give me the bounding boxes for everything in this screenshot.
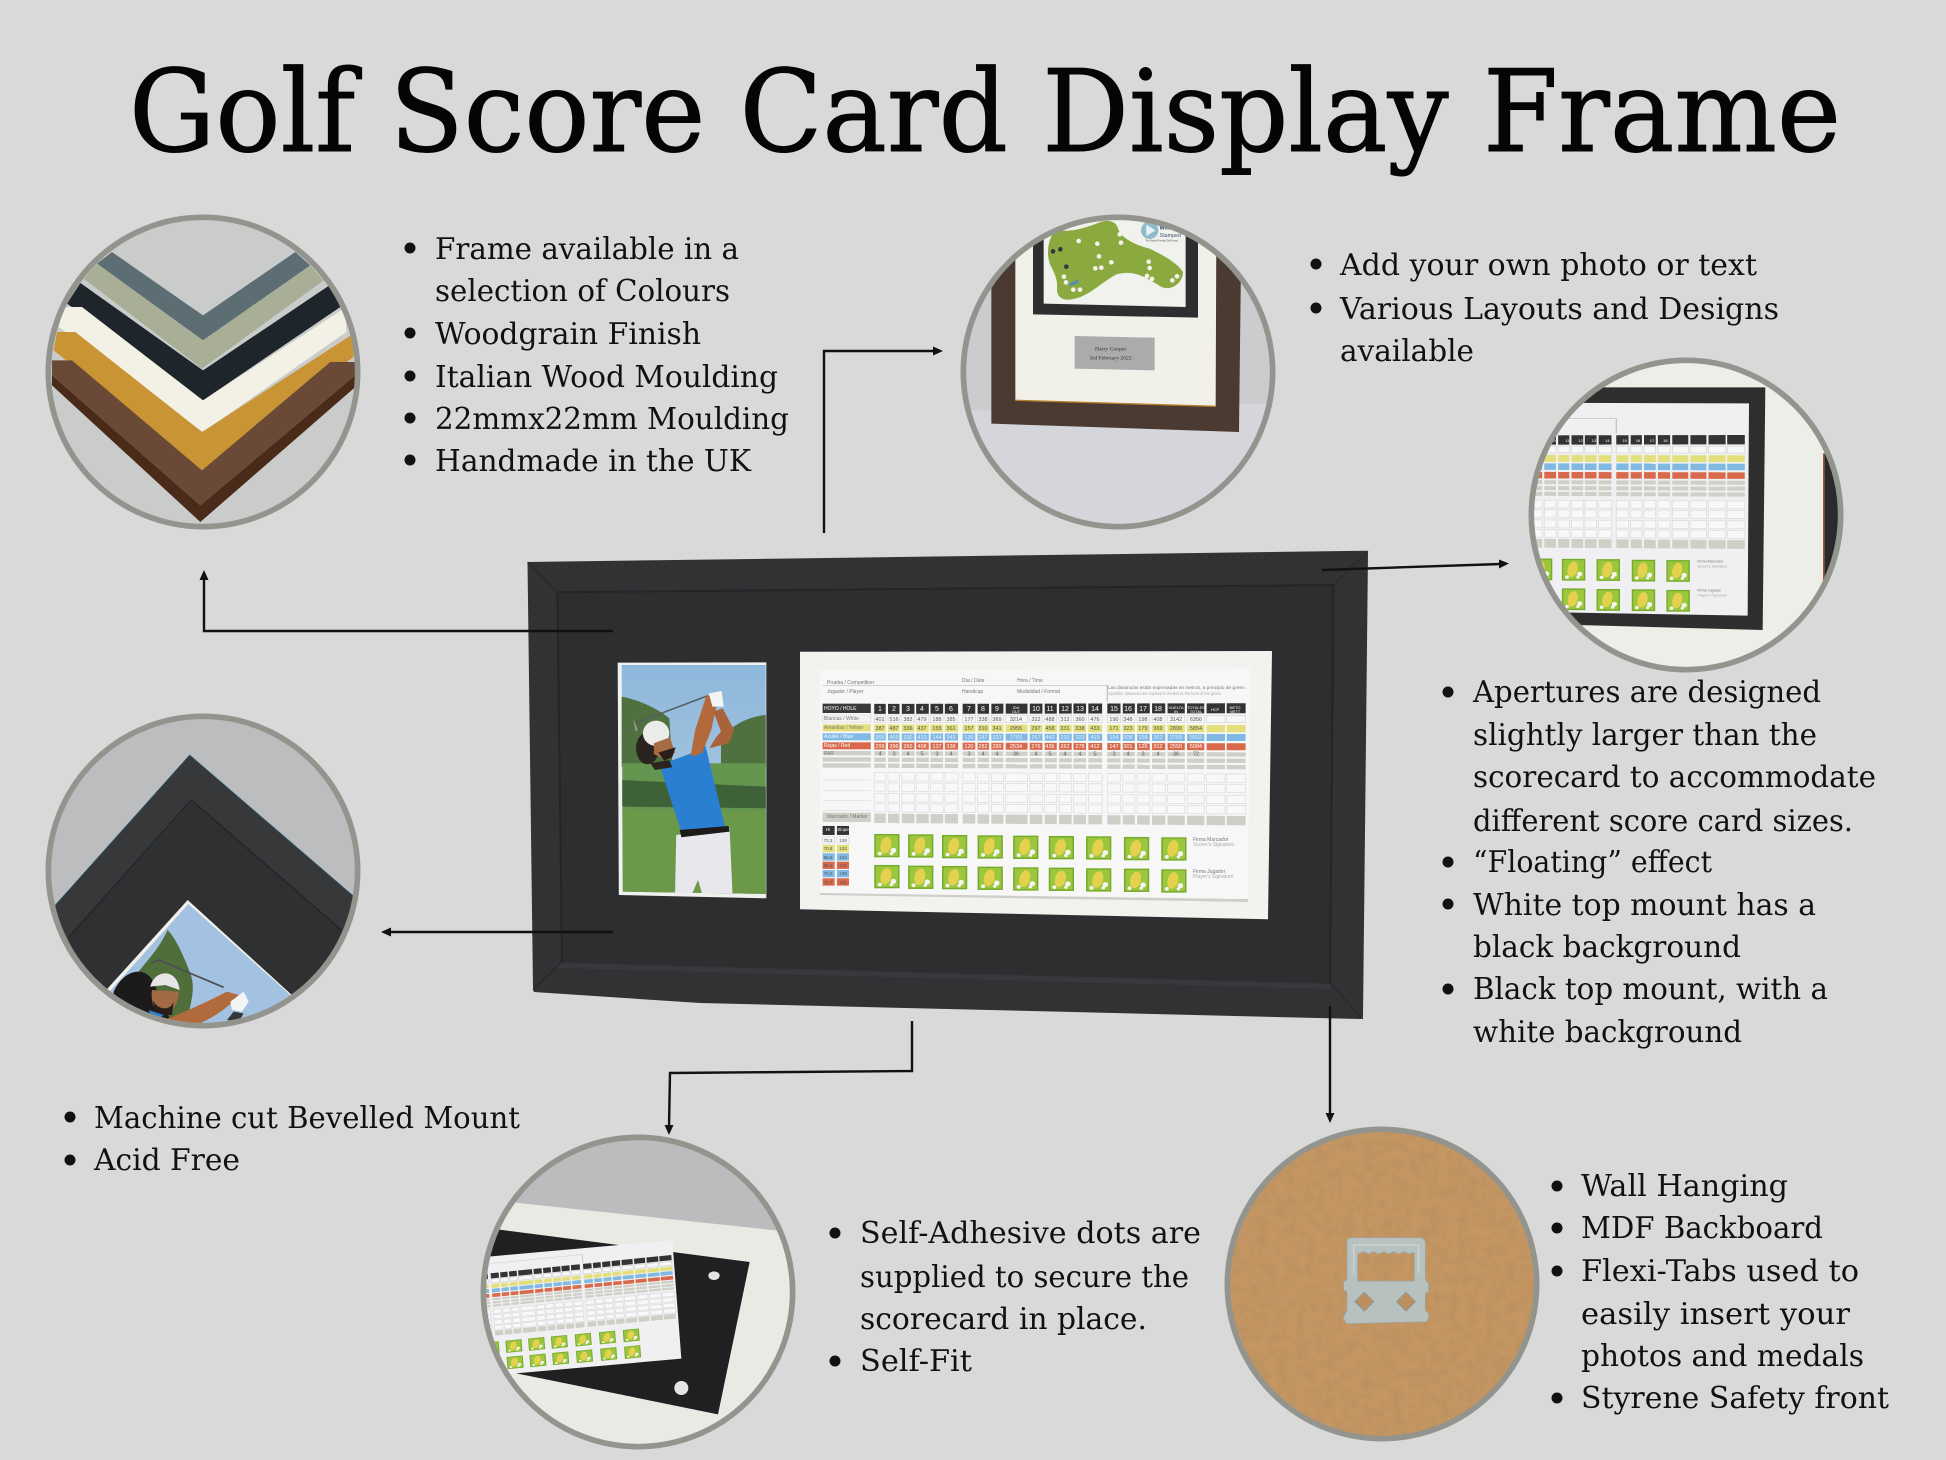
scorecard: 10 xyxy=(1032,706,1040,713)
scorecard: 323 xyxy=(1075,735,1085,741)
text block: mount xyxy=(64,1101,520,1178)
panel: aperture close-up circle: Firma Marcador xyxy=(1697,559,1724,563)
scorecard: 179 xyxy=(1138,726,1148,732)
scorecard: 353 xyxy=(1153,735,1163,741)
scorecard: 139 xyxy=(839,871,847,876)
panel: aperture close-up circle: Scorer's Signature xyxy=(1697,564,1727,568)
scorecard: NETO xyxy=(1229,705,1241,710)
panel: aperture close-up circle: Firma Jugador xyxy=(1697,588,1722,592)
scorecard: 433 xyxy=(1090,726,1100,732)
text block: back of frame: Styrene Safety front xyxy=(1581,1381,1889,1416)
scorecard: 7 xyxy=(967,706,971,713)
scorecard: 458 xyxy=(1045,726,1055,732)
scorecard: 297 xyxy=(1031,726,1041,732)
text block: custom photo and layouts: Various Layouts and Designs xyxy=(1339,292,1779,327)
scorecard: Jugador / Player xyxy=(827,689,864,695)
scorecard: 2955 xyxy=(1010,726,1022,732)
scorecard: 4 xyxy=(981,752,985,758)
scorecard: 137 xyxy=(932,744,942,750)
scorecard: 5 xyxy=(920,752,924,758)
scorecard: 4 xyxy=(906,752,910,758)
panel: plaque and photo layout circle: The Family Friendly Golf Venue xyxy=(1145,240,1179,243)
scorecard: 310 xyxy=(1060,735,1070,741)
scorecard: 401 xyxy=(875,717,885,723)
text block: back of frame: easily insert your xyxy=(1581,1297,1851,1332)
scorecard: 516 xyxy=(889,717,899,723)
scorecard: IDA xyxy=(1013,705,1020,710)
text block: frame features xyxy=(404,232,789,479)
text block: back of frame: Wall Hanging xyxy=(1581,1169,1788,1204)
scorecard: 132 xyxy=(839,846,847,851)
panel: main black display frame xyxy=(528,551,1368,1019)
scorecard: 13 xyxy=(1076,706,1084,713)
arrow: frame to plaque circle xyxy=(824,346,943,533)
scorecard: 312 xyxy=(1153,744,1163,750)
scorecard: 15 xyxy=(1110,706,1118,713)
panel: self-adhesive dots circle xyxy=(400,1120,806,1460)
scorecard xyxy=(820,668,1250,899)
scorecard: 369 xyxy=(1153,726,1163,732)
scorecard: 278 xyxy=(1075,744,1085,750)
scorecard: 488 xyxy=(1045,717,1055,723)
text block: frame features: Italian Wood Moulding xyxy=(435,360,778,395)
scorecard: 70,8 xyxy=(824,846,833,851)
text block: adhesive dots: Self-Fit xyxy=(860,1344,972,1379)
panel: plaque and photo layout circle: Harry Cooper xyxy=(1095,347,1126,353)
text block: apertures: Black top mount, with a xyxy=(1473,972,1828,1007)
scorecard: 159 xyxy=(1138,735,1148,741)
scorecard: 442 xyxy=(1045,735,1055,741)
icon: wall hanger xyxy=(1343,1238,1429,1324)
text block: apertures xyxy=(1442,675,1876,1050)
arrow: frame to backboard circle xyxy=(1326,1006,1334,1123)
scorecard: 387 xyxy=(875,726,885,732)
text block: adhesive dots xyxy=(830,1216,1201,1379)
text block: frame features: Frame available in a xyxy=(435,232,739,267)
scorecard: Hora / Time xyxy=(1017,678,1043,684)
panel: aperture close-up circle: 13 xyxy=(1592,438,1597,443)
scorecard: 437 xyxy=(917,726,927,732)
scorecard: 4 xyxy=(1063,752,1067,758)
scorecard: 385 xyxy=(946,717,956,723)
scorecard: 72,7 xyxy=(824,880,833,885)
text block: custom photo and layouts: available xyxy=(1340,334,1474,369)
panel: aperture close-up circle: 14 xyxy=(1605,438,1610,443)
scorecard: 198 xyxy=(1138,717,1148,723)
scorecard: 120 xyxy=(964,744,974,750)
arrow: frame to adhesive dots circle xyxy=(664,1021,912,1135)
scorecard: 323 xyxy=(992,735,1002,741)
scorecard: 131 xyxy=(839,880,847,885)
text block: back of frame: MDF Backboard xyxy=(1581,1211,1823,1246)
scorecard: 5552 xyxy=(1190,735,1202,741)
text block: apertures: Apertures are designed xyxy=(1472,675,1821,710)
scorecard: Firma Jugador xyxy=(1193,869,1226,875)
scorecard: 331 xyxy=(1060,726,1070,732)
scorecard: 1 xyxy=(878,706,882,713)
scorecard: 66,4 xyxy=(824,863,833,868)
scorecard: 383 xyxy=(903,717,913,723)
scorecard: OUT xyxy=(1012,709,1021,714)
scorecard: 355 xyxy=(875,735,885,741)
scorecard: 5 xyxy=(1093,752,1097,758)
scorecard: 310 xyxy=(978,726,988,732)
arrow: mat to bevel circle xyxy=(381,928,613,936)
text block: apertures: white background xyxy=(1473,1015,1742,1050)
text block: adhesive dots: scorecard in place. xyxy=(860,1302,1147,1337)
text block: apertures: White top mount has a xyxy=(1473,888,1816,923)
text block: apertures: “Floating” effect xyxy=(1473,845,1712,880)
text block: frame features: 22mmx22mm Moulding xyxy=(435,402,789,437)
scorecard: 155 xyxy=(932,726,942,732)
scorecard: 139 xyxy=(839,838,847,843)
scorecard: 408 xyxy=(1153,717,1163,723)
text block: mount: Machine cut Bevelled Mount xyxy=(94,1101,520,1136)
scorecard: 3 xyxy=(1141,752,1145,758)
text block: frame features: Handmade in the UK xyxy=(435,444,752,479)
text block: apertures: scorecard to accommodate xyxy=(1473,760,1876,795)
arrow: mat to colours circle xyxy=(200,570,613,631)
scorecard: 5 xyxy=(935,706,939,713)
scorecard: 419 xyxy=(1090,735,1100,741)
scorecard: Slope xyxy=(837,827,849,832)
scorecard: 118 xyxy=(839,863,847,868)
scorecard: 4 xyxy=(920,706,924,713)
scorecard: TOTAL xyxy=(1190,709,1203,714)
scorecard: 11 xyxy=(1046,706,1054,713)
scorecard: 3142 xyxy=(1170,717,1182,723)
scorecard: 3 xyxy=(967,752,971,758)
scorecard: 282 xyxy=(978,744,988,750)
text block: adhesive dots: supplied to secure the xyxy=(860,1260,1189,1295)
scorecard: 361 xyxy=(946,726,956,732)
scorecard: 267 xyxy=(1031,735,1041,741)
scorecard: Sprinkler distances are marked in meters to the front of the green. xyxy=(1108,691,1222,696)
scorecard: 322 xyxy=(1031,717,1041,723)
scorecard: 5 xyxy=(1048,752,1052,758)
scorecard: 177 xyxy=(964,717,974,723)
panel: plaque and photo layout circle: World xyxy=(1160,226,1175,232)
panel: colour corner samples circle xyxy=(43,212,363,532)
scorecard: Las distancias están expresadas en metros, a principio de green. xyxy=(1108,685,1246,690)
scorecard: 469 xyxy=(889,735,899,741)
scorecard: Handicap xyxy=(962,689,983,695)
text block: apertures: black background xyxy=(1473,930,1741,965)
scorecard: 3 xyxy=(1112,752,1116,758)
scorecard: 3214 xyxy=(1010,717,1022,723)
scorecard: 130 xyxy=(964,735,974,741)
scorecard: Prueba / Competition xyxy=(827,680,874,686)
scorecard: 262 xyxy=(1060,744,1070,750)
scorecard: Blancas / White xyxy=(824,716,859,722)
scorecard: 16 xyxy=(1124,706,1132,713)
scorecard: 36 xyxy=(1013,752,1019,758)
scorecard: Scorer's Signature xyxy=(1193,842,1234,848)
scorecard: Azules / Blue xyxy=(824,734,853,740)
panel: aperture close-up circle: 10 xyxy=(1551,438,1557,443)
text block: back of frame xyxy=(1552,1169,1889,1416)
scorecard: 4 xyxy=(878,752,882,758)
scorecard: 343 xyxy=(946,735,956,741)
scorecard: 6 xyxy=(949,706,953,713)
scorecard: 190 xyxy=(1109,717,1119,723)
panel: plaque and photo layout circle: 3rd February 2022 xyxy=(1090,355,1132,361)
scorecard: 6356 xyxy=(1190,717,1202,723)
scorecard: 68,5 xyxy=(824,855,833,860)
scorecard: 2899 xyxy=(1170,726,1182,732)
scorecard: 287 xyxy=(978,735,988,741)
scorecard: 479 xyxy=(917,717,927,723)
text block: mount: Acid Free xyxy=(93,1143,240,1178)
scorecard: 126 xyxy=(1138,744,1148,750)
title: Golf Score Card Display Frame xyxy=(129,46,1841,178)
panel: bevelled mount circle xyxy=(46,714,360,1028)
scorecard: 3 xyxy=(906,706,910,713)
scorecard: 4 xyxy=(949,752,953,758)
scorecard: 338 xyxy=(978,717,988,723)
scorecard: Hi xyxy=(826,827,830,832)
scorecard: HOYO / HOLE xyxy=(824,706,857,712)
scorecard: 323 xyxy=(1123,726,1133,732)
scorecard: 289 xyxy=(992,744,1002,750)
scorecard: 147 xyxy=(1109,744,1119,750)
text block: apertures: different score card sizes. xyxy=(1473,804,1853,839)
panel: aperture close-up circle: 16 xyxy=(1636,438,1641,443)
scorecard: 4 xyxy=(1156,752,1160,758)
scorecard: 2793 xyxy=(1010,735,1022,741)
scorecard: 413 xyxy=(917,735,927,741)
scorecard: Firma Marcador xyxy=(1193,837,1229,843)
scorecard: 4 xyxy=(1126,752,1130,758)
scorecard: Día / Date xyxy=(962,678,985,684)
panel: aperture close-up circle: 12 xyxy=(1578,438,1584,443)
scorecard: HCP xyxy=(1211,707,1220,712)
scorecard: Rojas / Red xyxy=(824,743,850,749)
scorecard: Modalidad / Format xyxy=(1017,689,1061,695)
scorecard: Player's Signature xyxy=(1193,874,1234,880)
scorecard: 369 xyxy=(992,717,1002,723)
text block: frame features: Woodgrain Finish xyxy=(435,317,701,352)
text block: adhesive dots: Self-Adhesive dots are xyxy=(860,1216,1201,1251)
panel: aperture close-up circle: 18 xyxy=(1663,438,1668,443)
scorecard: 476 xyxy=(1090,717,1100,723)
scorecard: 341 xyxy=(992,726,1002,732)
panel: aperture close-up circle xyxy=(1352,350,1864,683)
scorecard: VUELTA xyxy=(1169,705,1184,710)
scorecard: 299 xyxy=(875,744,885,750)
scorecard: 348 xyxy=(1123,717,1133,723)
panel: aperture close-up circle: 17 xyxy=(1650,438,1655,443)
scorecard: 2550 xyxy=(1170,744,1182,750)
scorecard: NETT xyxy=(1230,709,1241,714)
panel: aperture close-up circle: 15 xyxy=(1622,438,1628,443)
scorecard: Amarillas / Yellow xyxy=(824,725,863,731)
golfer photo xyxy=(618,662,766,898)
scorecard: 154 xyxy=(1109,735,1119,741)
scorecard: 5084 xyxy=(1190,744,1202,750)
scorecard: PAR xyxy=(824,751,834,757)
scorecard: 8 xyxy=(981,706,985,713)
arrow: frame to aperture circle xyxy=(1322,560,1509,570)
scorecard: IN xyxy=(1174,709,1178,714)
scorecard: 338 xyxy=(1075,726,1085,732)
scorecard: 4 xyxy=(1078,752,1082,758)
text block: custom photo and layouts: Add your own photo or text xyxy=(1339,248,1757,283)
scorecard: 301 xyxy=(1123,744,1133,750)
scorecard aperture xyxy=(800,651,1272,919)
scorecard: 3 xyxy=(892,752,896,758)
scorecard: 330 xyxy=(903,735,913,741)
scorecard: 3 xyxy=(935,752,939,758)
scorecard: 5854 xyxy=(1190,726,1202,732)
scorecard: 144 xyxy=(932,735,942,741)
scorecard: 487 xyxy=(889,726,899,732)
scorecard: 4 xyxy=(995,752,999,758)
scorecard: 265 xyxy=(903,744,913,750)
panel: plaque and photo layout circle xyxy=(960,214,1276,530)
scorecard: 2534 xyxy=(1010,744,1022,750)
scorecard: 18 xyxy=(1154,706,1162,713)
scorecard: 312 xyxy=(1060,717,1070,723)
text block: apertures: slightly larger than the xyxy=(1473,718,1817,753)
panel: MDF backboard and hanger circle xyxy=(1225,1127,1539,1441)
scorecard: 2 xyxy=(892,706,896,713)
scorecard: 9 xyxy=(995,706,999,713)
scorecard: 360 xyxy=(1075,717,1085,723)
scorecard: 73,3 xyxy=(824,838,833,843)
scorecard: Marcador / Marker xyxy=(827,814,868,820)
scorecard: 336 xyxy=(903,726,913,732)
scorecard: 2759 xyxy=(1170,735,1182,741)
scorecard: 17 xyxy=(1139,706,1147,713)
scorecard: 308 xyxy=(1123,735,1133,741)
text block: back of frame: photos and medals xyxy=(1581,1339,1864,1374)
panel: plaque and photo layout circle: Stamped xyxy=(1160,233,1181,239)
scorecard: 72 xyxy=(1193,752,1199,758)
scorecard: 188 xyxy=(932,717,942,723)
scorecard: 408 xyxy=(917,744,927,750)
scorecard: 171 xyxy=(1109,726,1119,732)
scorecard: 14 xyxy=(1091,706,1099,713)
panel: aperture close-up circle: Player's Signature xyxy=(1697,593,1727,597)
scorecard: 124 xyxy=(839,855,847,860)
scorecard: 396 xyxy=(889,744,899,750)
scorecard: 12 xyxy=(1061,706,1069,713)
panel: aperture close-up circle: 11 xyxy=(1565,438,1570,443)
scorecard: 412 xyxy=(1090,744,1100,750)
text block: custom photo and layouts xyxy=(1310,248,1779,369)
text block: back of frame: Flexi-Tabs used to xyxy=(1581,1254,1859,1289)
scorecard: 436 xyxy=(1045,744,1055,750)
text block: frame features: selection of Colours xyxy=(435,274,730,309)
scorecard: 338 xyxy=(946,744,956,750)
scorecard: 4 xyxy=(1034,752,1038,758)
scorecard: 76,5 xyxy=(824,871,833,876)
scorecard: 276 xyxy=(1031,744,1041,750)
scorecard: 36 xyxy=(1173,752,1179,758)
scorecard: TOTALES xyxy=(1187,705,1205,710)
scorecard: 157 xyxy=(964,726,974,732)
